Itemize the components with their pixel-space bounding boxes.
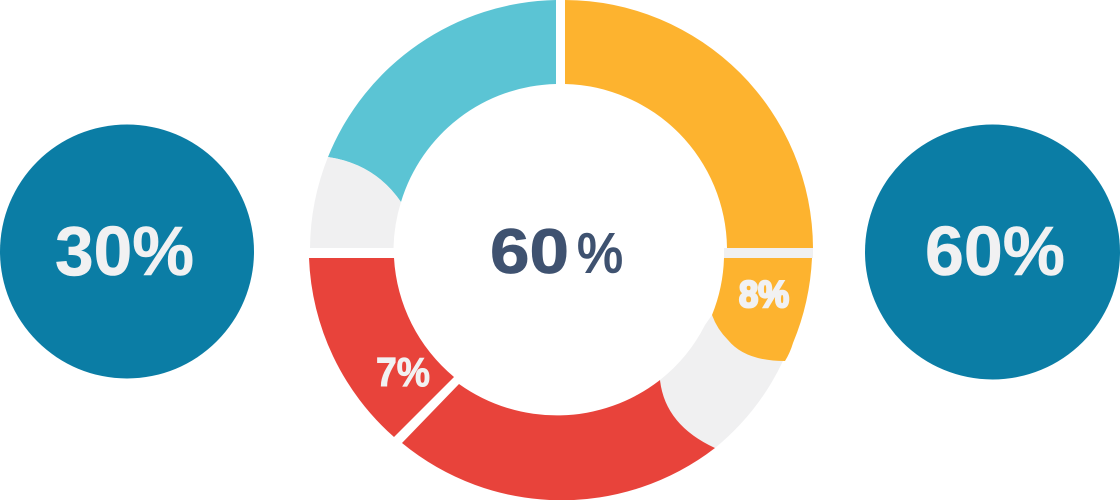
divider strip: gray between yellow segments [724,248,813,258]
segment: yellow lower [712,258,812,361]
left stat circle: 30% [0,124,254,378]
segment: red left [309,258,454,437]
left stat circle: 30%: 30% [55,212,194,290]
center value: 60% [490,217,623,287]
donut chart [309,0,813,500]
segment: right gray remainder [660,315,783,448]
segment: red bottom [402,380,715,500]
center value: 60%: 60 [490,217,569,287]
right stat circle: 60% [865,124,1120,380]
segment: teal [328,0,556,202]
label: 8%: 8% [739,274,789,315]
center value: 60%: % [577,221,623,284]
segment: yellow upper [565,0,813,248]
right stat circle: 60%: 60% [925,212,1065,290]
segment: left gray remainder [310,157,401,248]
label: 7%: 7% [376,349,430,395]
